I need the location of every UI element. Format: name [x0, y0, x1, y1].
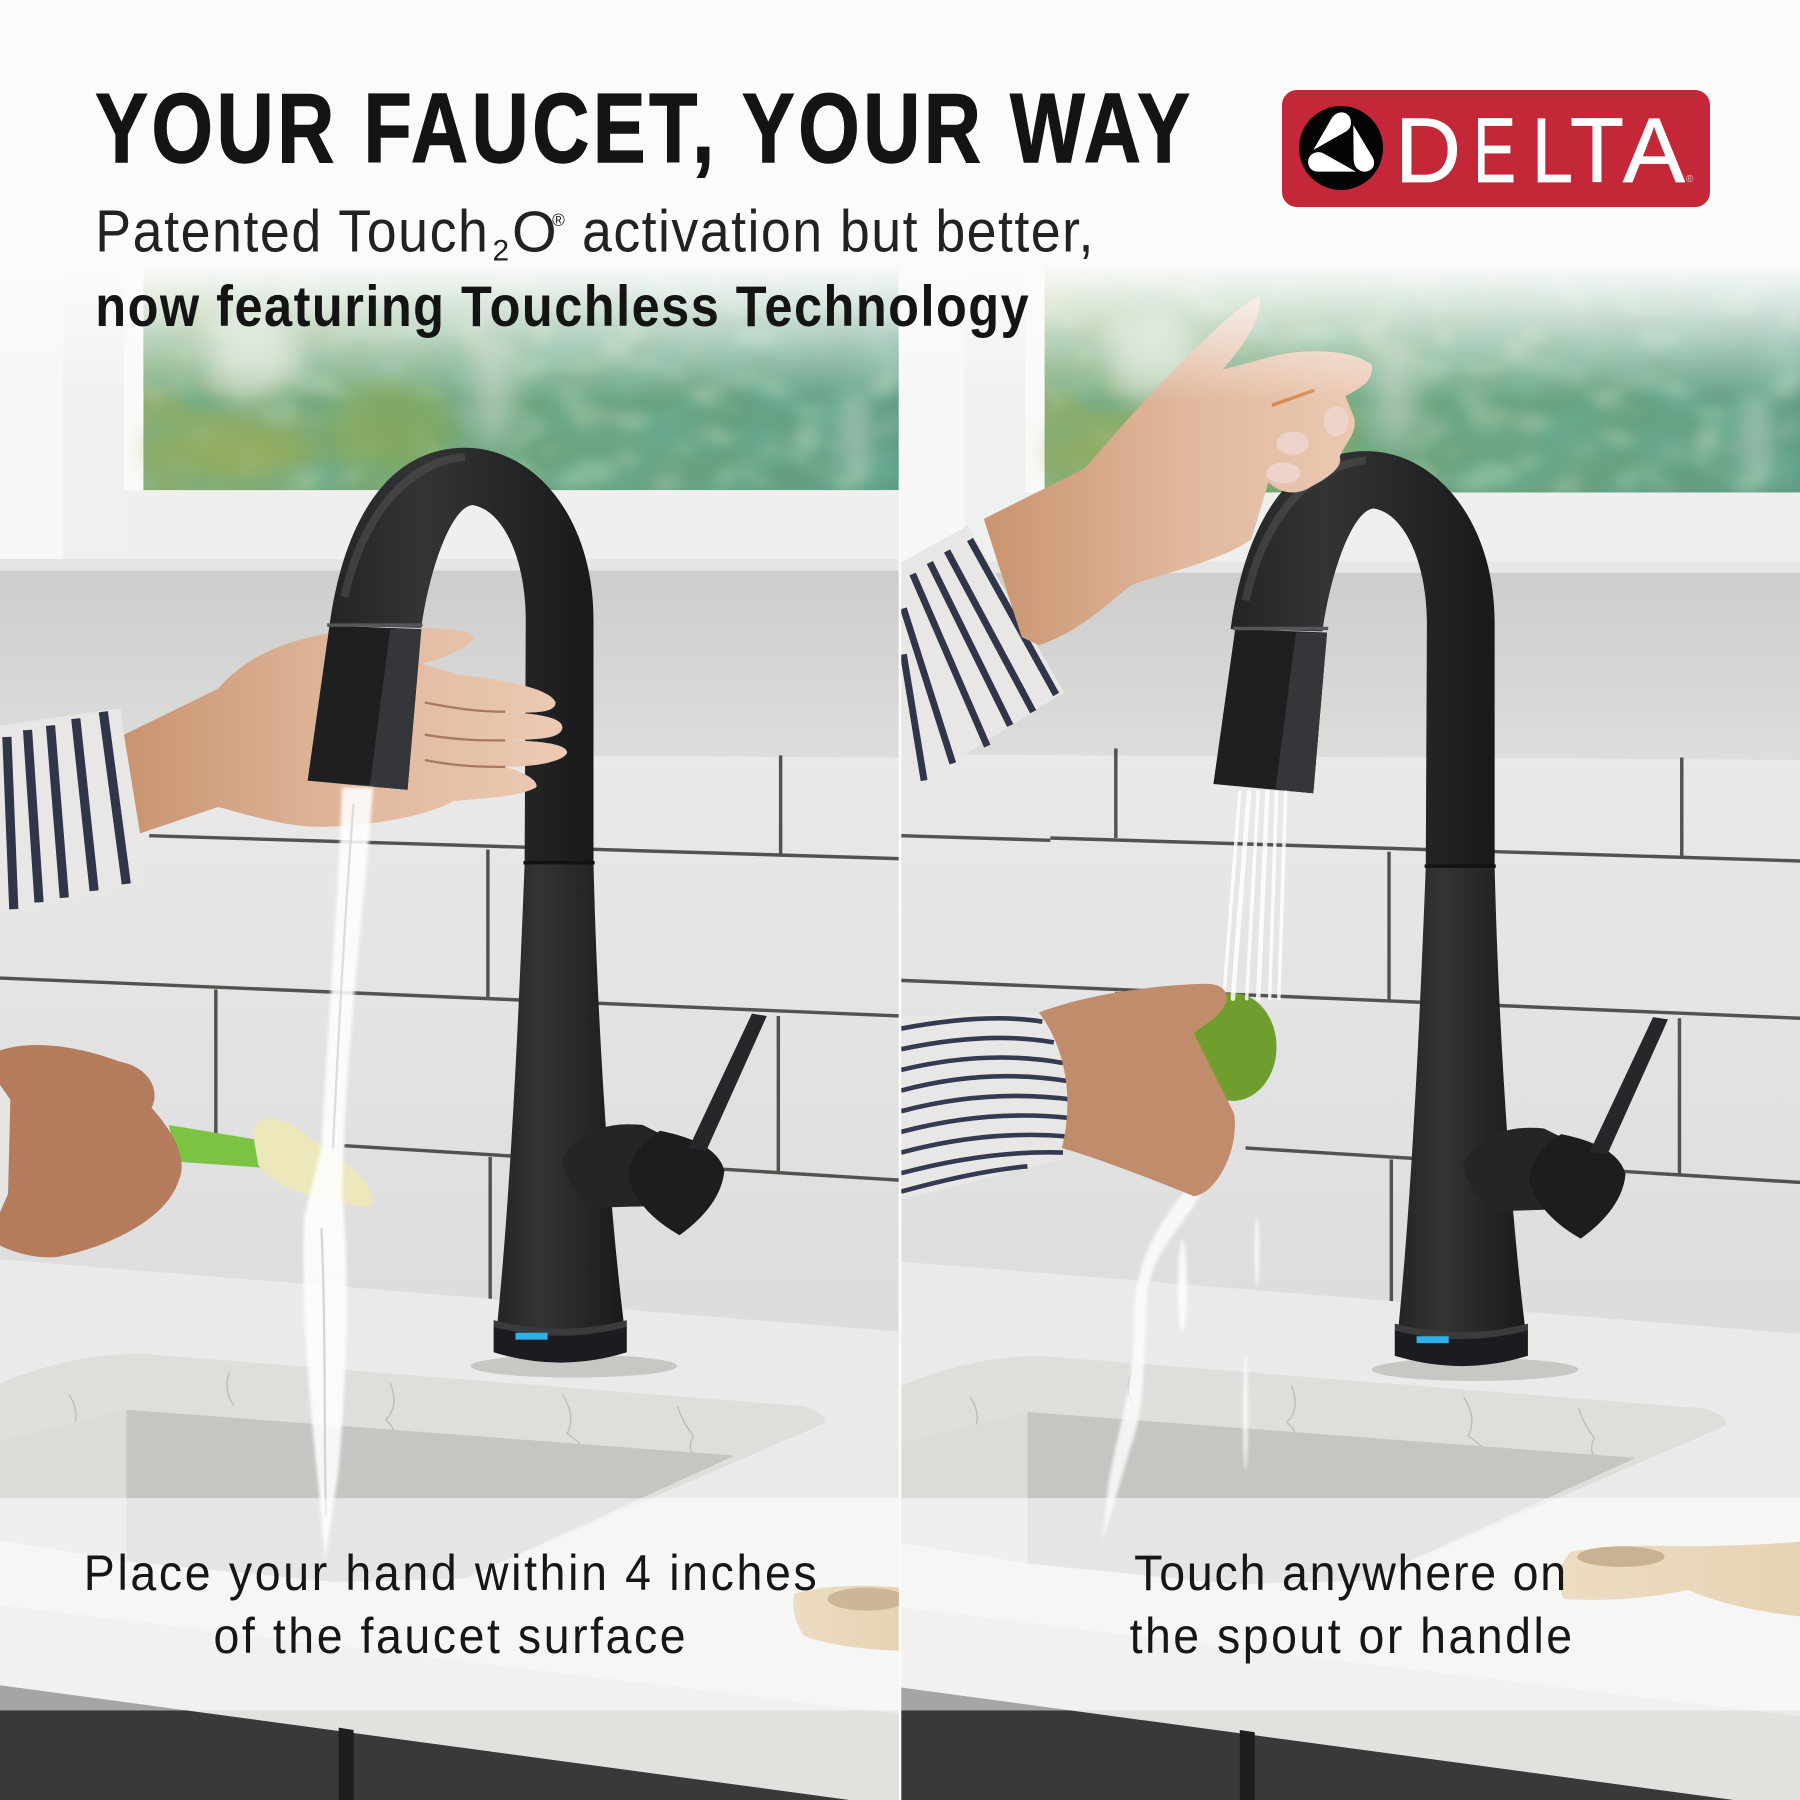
caption band: left — [0, 1498, 899, 1710]
caption band: right — [901, 1498, 1800, 1710]
caption: right — [1130, 1545, 1572, 1665]
caption: left — [84, 1545, 817, 1665]
caption: right: Touch anywhere on — [1134, 1545, 1566, 1601]
lower hand holding lime — [1039, 984, 1235, 1196]
subtitle — [95, 199, 1093, 268]
cutting board: left — [793, 1586, 906, 1651]
hand touching spout — [984, 296, 1372, 645]
subtitle: activation but better, — [582, 199, 1093, 265]
faucet: left — [329, 448, 767, 1378]
lime being washed — [1189, 993, 1277, 1101]
faucet: right — [1231, 451, 1668, 1381]
subtitle: O — [512, 200, 557, 264]
top fade into white — [0, 0, 1800, 402]
panel: touch activation photo — [901, 274, 1800, 1800]
subtitle: ® — [552, 210, 565, 230]
logo: Delta: ® — [1686, 174, 1694, 185]
logo: Delta: L — [1532, 100, 1573, 202]
cutting board: right — [1559, 1542, 1800, 1616]
logo: Delta: D — [1395, 100, 1461, 202]
subtitle: 2 — [492, 235, 509, 268]
lower hand with spatula — [0, 1045, 372, 1257]
upper arm sleeve — [0, 708, 131, 910]
logo: Delta: T — [1570, 100, 1624, 202]
spout head: right — [1213, 627, 1328, 793]
caption: left: Place your hand within 4 inches — [84, 1545, 817, 1601]
panel: touchless activation photo — [0, 274, 899, 1800]
hand under spout — [124, 628, 567, 833]
subtitle bold line: now featuring Touchless Technology — [95, 275, 1029, 339]
divider between panels — [899, 230, 901, 1800]
water stream — [303, 788, 373, 1561]
extra tile joints — [901, 748, 1116, 840]
spout head: left — [308, 623, 422, 790]
logo: Delta: E — [1473, 100, 1516, 202]
caption: left: of the faucet surface — [214, 1608, 686, 1665]
upper arm sleeve — [901, 526, 1064, 794]
title: YOUR FAUCET, YOUR WAY — [95, 72, 1190, 183]
lower arm sleeve — [901, 1012, 1077, 1200]
splash water — [1102, 1182, 1259, 1544]
caption: right: the spout or handle — [1130, 1608, 1572, 1665]
subtitle: Patented Touch — [95, 199, 488, 265]
spray water — [1224, 792, 1286, 999]
logo: Delta — [1282, 90, 1710, 207]
logo: Delta: A — [1623, 100, 1686, 202]
